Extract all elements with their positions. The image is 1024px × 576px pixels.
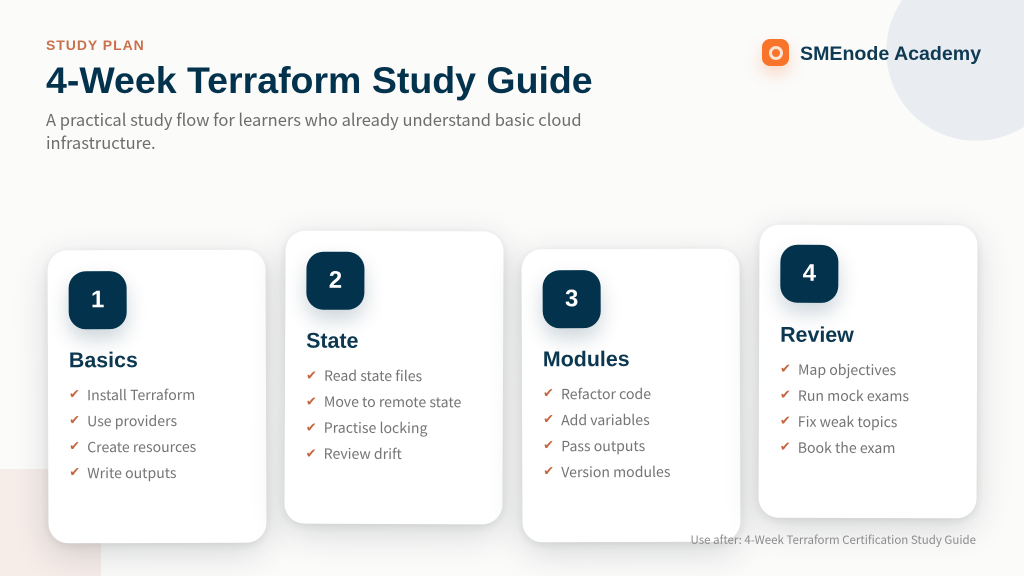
checklist item: Move to remote state bbox=[324, 392, 462, 412]
checklist item: Run mock exams bbox=[798, 385, 909, 405]
checklist item: Refactor code bbox=[561, 384, 651, 404]
checklist item: ✔ bbox=[69, 439, 80, 454]
checklist item: Write outputs bbox=[87, 463, 177, 483]
step number 2 bbox=[307, 251, 365, 309]
background corner block bbox=[0, 469, 101, 576]
panel: card 2 state bbox=[285, 231, 504, 524]
checklist item: ✔ bbox=[780, 361, 791, 376]
brand logo icon bbox=[762, 39, 789, 66]
subtitle: infrastructure. bbox=[46, 130, 156, 154]
step number 1: 1 bbox=[91, 286, 104, 313]
checklist item: Pass outputs bbox=[561, 436, 645, 456]
checklist item: Create resources bbox=[87, 437, 196, 457]
checklist item: Add variables bbox=[561, 410, 650, 430]
checklist item: Install Terraform bbox=[87, 385, 195, 405]
checklist item: Review drift bbox=[324, 444, 402, 464]
panel: card 4 review bbox=[758, 224, 978, 518]
footnote: Use after: 4-Week Terraform Certification Study Guide bbox=[691, 532, 976, 548]
heading: basics: Basics bbox=[69, 348, 138, 372]
heading: review: Review bbox=[780, 322, 854, 346]
checklist item: ✔ bbox=[69, 387, 80, 402]
checklist item: Map objectives bbox=[798, 359, 896, 379]
checklist item: Fix weak topics bbox=[798, 411, 897, 431]
step number 3: 3 bbox=[565, 285, 578, 312]
checklist item: ✔ bbox=[780, 387, 791, 402]
checklist item: ✔ bbox=[306, 394, 317, 409]
heading: modules: Modules bbox=[543, 347, 630, 371]
checklist item: ✔ bbox=[69, 465, 80, 480]
checklist item: Use providers bbox=[87, 411, 177, 431]
checklist item: ✔ bbox=[543, 412, 554, 427]
checklist item: ✔ bbox=[780, 439, 791, 454]
checklist item: ✔ bbox=[543, 438, 554, 453]
step number 1 bbox=[69, 271, 127, 329]
subtitle: A practical study flow for learners who already understand basic cloud bbox=[46, 107, 582, 131]
eyebrow: study plan: STUDY PLAN bbox=[46, 37, 145, 53]
step number 3 bbox=[543, 270, 601, 328]
checklist item: Version modules bbox=[561, 462, 670, 482]
checklist item: ✔ bbox=[543, 464, 554, 479]
checklist item: ✔ bbox=[306, 368, 317, 383]
heading: state: State bbox=[306, 329, 359, 353]
panel: card 3 modules bbox=[521, 249, 741, 542]
checklist item: Read state files bbox=[324, 366, 423, 386]
checklist item: ✔ bbox=[780, 413, 791, 428]
checklist item: ✔ bbox=[306, 446, 317, 461]
checklist item: ✔ bbox=[69, 413, 80, 428]
checklist item: Practise locking bbox=[324, 418, 428, 438]
step number 2: 2 bbox=[329, 266, 343, 293]
title: 4-Week Terraform Study Guide bbox=[46, 58, 593, 100]
brand name: SMEnode Academy bbox=[800, 42, 981, 64]
checklist item: ✔ bbox=[543, 386, 554, 401]
panel: card 1 basics bbox=[47, 250, 267, 543]
subtitle bbox=[46, 107, 582, 154]
step number 4 bbox=[780, 244, 838, 302]
step number 4: 4 bbox=[803, 259, 816, 286]
checklist item: ✔ bbox=[306, 420, 317, 435]
background circle bbox=[886, 0, 1024, 141]
checklist item: Book the exam bbox=[798, 437, 895, 457]
